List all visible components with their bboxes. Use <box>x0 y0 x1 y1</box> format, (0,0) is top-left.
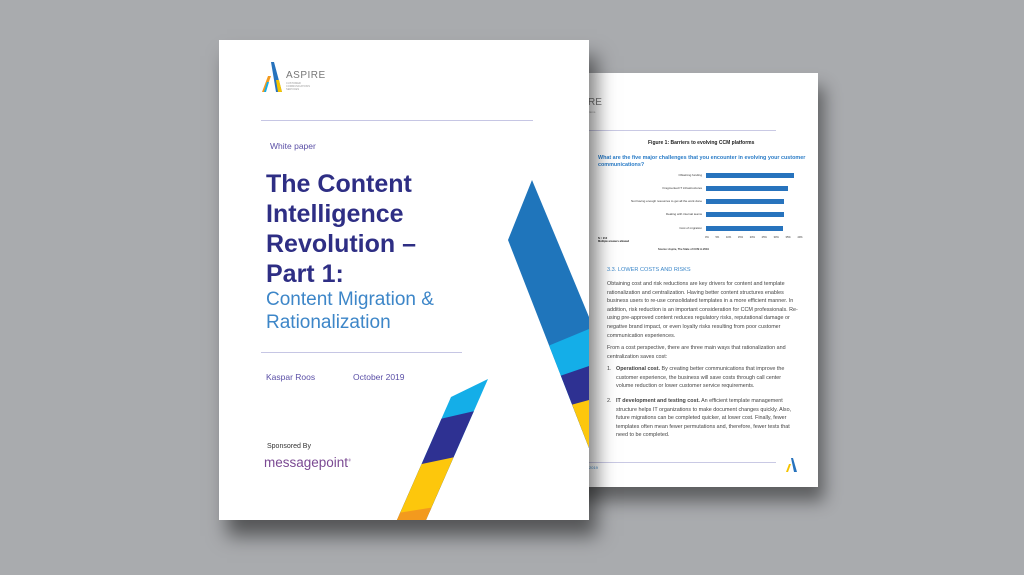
subtitle: Rationalization <box>266 312 391 333</box>
logo: Aspire: ASPIRE <box>286 70 326 81</box>
subtitle <box>266 289 434 333</box>
body text: negative brand impact, or even loyalty risks resulting from poor customer <box>607 324 780 330</box>
bar chart: Not having enough resources to get all the work done <box>631 199 702 203</box>
back page <box>570 73 818 487</box>
body text: business users to re-use consolidated templates in a more efficient manner. In <box>607 298 793 304</box>
bar chart <box>598 173 803 243</box>
body text: centralization saves cost: <box>607 354 667 360</box>
back page: tions <box>589 110 595 114</box>
chart question <box>598 155 806 168</box>
figure title: Figure 1: Barriers to evolving CCM platforms <box>648 140 754 146</box>
body text <box>607 281 798 438</box>
sponsor: Sponsored By <box>267 443 311 450</box>
front page <box>219 40 589 520</box>
bar chart: Obtaining funding <box>678 173 702 177</box>
bar chart: Multiple answers allowed <box>598 240 629 243</box>
title: Revolution – <box>266 230 416 258</box>
body text: communication experiences. <box>607 333 675 339</box>
body text: using pre-approved content reduces regulatory risks, reputational damage or <box>607 315 790 321</box>
body text: From a cost perspective, there are three main ways that rationalization and <box>607 345 786 351</box>
title: Part 1: <box>266 260 344 288</box>
body text: templates often mean fewer permutations and, therefore, fewer tests that <box>616 424 790 430</box>
subtitle: Content Migration & <box>266 289 434 310</box>
bar chart: Fragmented IT infrastructures <box>663 186 702 190</box>
body text: addition, risk reduction is an important consideration for CCM professionals. Re- <box>607 307 798 313</box>
body text: rationalization and centralization. Having better content structures enables <box>607 290 784 296</box>
icon: small A logo <box>786 458 797 472</box>
body text: customer experience, the business will save costs through call center <box>616 375 781 381</box>
title <box>266 170 416 288</box>
sponsor logo: messagepoint: messagepoint® <box>264 455 351 470</box>
bar chart: 0% 5% 10% 15% 20% 25% 30% 35% 40% <box>705 236 803 239</box>
body text: volume reduction or lower customer service requirements. <box>616 383 754 389</box>
body text: need to be completed. <box>616 432 669 438</box>
body text: 2. IT development and testing cost. An efficient template management <box>607 398 783 404</box>
back page logo fragment: RE <box>588 97 602 108</box>
title: Intelligence <box>266 200 404 228</box>
body text: structure helps IT organizations to make document changes quickly. Also, <box>616 407 791 413</box>
logo: Aspire: SERVICES <box>286 88 299 91</box>
chart question: communications? <box>598 162 644 168</box>
logo: Aspire <box>262 62 326 92</box>
body text: 1. Operational cost. By creating better communications that improve the <box>607 366 784 372</box>
section heading: 3.3. LOWER COSTS AND RISKS <box>607 267 691 273</box>
back page: Source: Aspire, The State of CCM in 2019 <box>658 248 709 251</box>
front page: October 2019 <box>353 372 405 382</box>
logo: Aspire: COMMUNICATIONS <box>286 85 310 88</box>
label: white paper: White paper <box>270 141 316 151</box>
logo: Aspire: CUSTOMER <box>286 82 301 85</box>
decorative stripes <box>397 180 589 520</box>
author and date: Kaspar Roos <box>266 372 315 382</box>
body text: Obtaining cost and risk reductions are key drivers for content and template <box>607 281 785 287</box>
bar chart: Cost of migration <box>679 226 702 230</box>
bar chart: Dealing with internal teams <box>666 212 702 216</box>
title: The Content <box>266 170 412 198</box>
footer date: 2019 <box>589 465 598 470</box>
body text: future migrations can be completed quicker, at lower cost. Finally, fewer <box>616 415 786 421</box>
bar chart: N = 212 <box>598 237 607 240</box>
chart question: What are the five major challenges that you encounter in evolving your customer <box>598 155 805 161</box>
